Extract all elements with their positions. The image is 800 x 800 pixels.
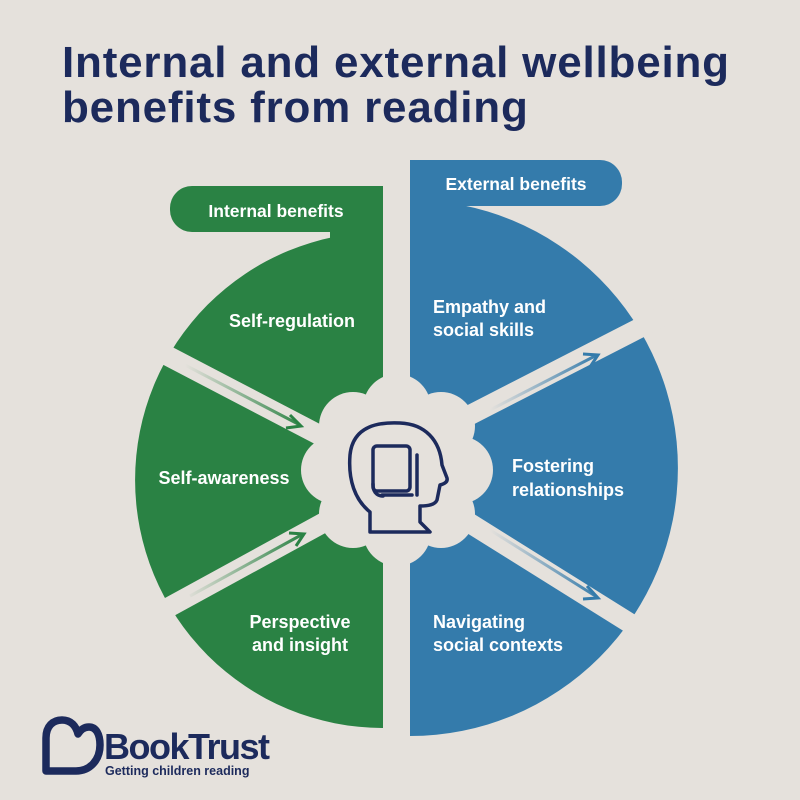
labels: Perspective — [249, 612, 351, 632]
panel: internal benefits: Internal benefits — [208, 201, 344, 221]
gaps — [120, 297, 700, 667]
labels: Fostering — [512, 456, 594, 476]
title — [62, 38, 730, 132]
panel: internal benefits — [135, 186, 383, 728]
panel: external benefits — [410, 160, 678, 736]
labels: social contexts — [433, 635, 563, 655]
center flower — [301, 374, 493, 566]
labels: social skills — [433, 320, 534, 340]
title: benefits from reading — [62, 83, 529, 132]
arrows — [185, 354, 598, 599]
logo: Getting children reading — [105, 764, 249, 778]
logo: BookTrust — [104, 726, 270, 767]
logo — [46, 720, 270, 778]
labels: Empathy and — [433, 297, 546, 317]
title: Internal and external wellbeing — [62, 38, 730, 87]
panel: external benefits: External benefits — [445, 174, 587, 194]
icon: head with book — [350, 423, 447, 532]
labels: Self-regulation — [229, 311, 355, 331]
labels: and insight — [252, 635, 348, 655]
labels: relationships — [512, 480, 624, 500]
labels: Navigating — [433, 612, 525, 632]
labels: Self-awareness — [158, 468, 290, 488]
labels — [158, 297, 624, 655]
